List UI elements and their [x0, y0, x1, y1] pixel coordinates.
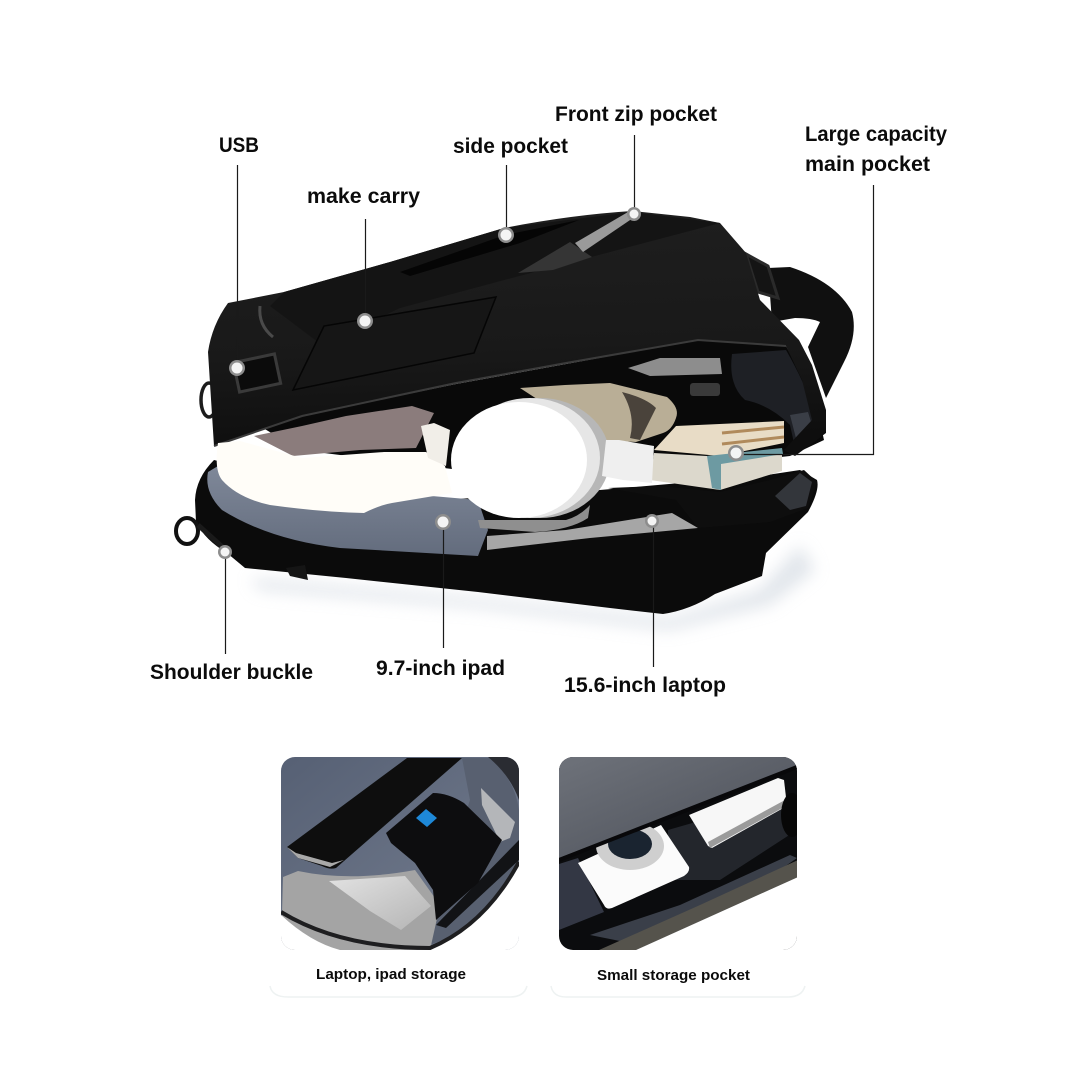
felt sleeve	[281, 870, 440, 950]
carry strap panel	[293, 297, 496, 390]
headphones rim	[470, 398, 610, 518]
lining bag	[731, 350, 818, 452]
buckle cord	[198, 525, 228, 552]
caption: Small storage pocket	[597, 968, 750, 984]
label: Large capacity main pocket	[728, 122, 947, 461]
interior dark cavity	[258, 340, 824, 472]
side mesh opening	[775, 473, 812, 510]
headphone hinge left	[421, 423, 450, 466]
charger in main pocket	[690, 383, 720, 396]
label: Shoulder buckle: Shoulder buckle	[150, 660, 313, 684]
tablet in main pocket	[628, 358, 722, 376]
camera body	[578, 825, 689, 909]
caption: Laptop, ipad storage	[316, 967, 466, 983]
label: USB: USB	[219, 133, 259, 157]
lower shell	[195, 460, 818, 614]
denim patch	[559, 858, 604, 930]
handle ring	[746, 254, 778, 298]
charger edge	[708, 800, 786, 848]
right lining	[430, 758, 519, 945]
headphones inner rim	[460, 398, 600, 518]
grey felt laptop sleeve	[487, 513, 698, 550]
backpack illustration	[176, 211, 854, 630]
newspaper print	[622, 392, 656, 440]
rolled clothes	[254, 406, 434, 456]
outer top right strap	[488, 757, 519, 800]
laptop edge	[478, 505, 590, 532]
zipper leather pull	[518, 242, 592, 273]
flap	[559, 757, 797, 858]
zipper band	[599, 860, 798, 950]
bottom strap stub	[286, 565, 308, 580]
right strip	[436, 840, 519, 928]
upper book	[654, 421, 784, 456]
coil	[781, 796, 797, 836]
white corner	[636, 877, 798, 950]
main zipper	[214, 340, 786, 446]
pouch	[386, 793, 502, 920]
newspaper roll	[520, 383, 677, 442]
white corners	[281, 862, 519, 950]
lining	[590, 855, 797, 945]
front zipper	[575, 212, 636, 252]
label: make carry	[307, 184, 420, 329]
card border	[551, 986, 805, 997]
black laptop pocket	[608, 470, 817, 528]
photo: camera and charger	[559, 757, 803, 950]
top panel shade	[270, 212, 720, 345]
grey interior padding	[207, 466, 488, 556]
label: Front zip pocket	[555, 102, 717, 221]
label: Front zip pocket: Front zip pocket	[555, 102, 717, 126]
ground shadow	[250, 545, 815, 630]
side pocket opening	[400, 220, 579, 276]
label: 15.6-inch laptop: 15.6-inch laptop	[564, 673, 726, 697]
label: 9.7-inch ipad: 9.7-inch ipad	[376, 656, 505, 680]
phone edge	[287, 847, 344, 867]
white shoes	[217, 441, 452, 513]
silver laptop right	[481, 788, 515, 842]
back fabric	[668, 809, 788, 880]
infographic canvas	[150, 106, 947, 998]
label: Large capacity main pocket: main pocket	[805, 152, 930, 176]
silver laptop	[329, 876, 431, 930]
label: Shoulder buckle	[150, 545, 313, 684]
book stripes	[722, 427, 784, 444]
label: Large capacity main pocket: Large capacity	[805, 122, 947, 146]
main top shell	[208, 211, 826, 456]
card: small storage pocket	[551, 757, 805, 997]
headphone hinge right	[602, 440, 654, 483]
left ring	[201, 383, 217, 417]
card border	[270, 986, 527, 997]
blue logo	[416, 809, 437, 827]
bottom zip	[281, 862, 519, 948]
book blue cover	[707, 448, 783, 490]
card: laptop, ipad storage	[270, 757, 527, 997]
label: 9.7-inch ipad	[376, 514, 505, 680]
carry handle	[768, 267, 854, 398]
leather trim	[260, 306, 273, 337]
label: USB	[219, 133, 259, 376]
charger	[689, 778, 787, 848]
lower book	[650, 449, 782, 490]
flap zipper	[559, 767, 797, 860]
label: 15.6-inch laptop	[564, 514, 726, 697]
label: side pocket: side pocket	[453, 134, 568, 158]
label: side pocket	[453, 134, 568, 243]
phone	[287, 758, 462, 869]
camera lens	[596, 822, 664, 870]
buckle ring	[176, 518, 198, 544]
usb port plate	[233, 354, 281, 392]
camera lens glass	[608, 829, 652, 859]
label: make carry: make carry	[307, 184, 420, 208]
headphones white ear cup	[451, 402, 587, 518]
lining highlight	[790, 412, 814, 446]
photo: laptop and ipad	[281, 757, 519, 950]
